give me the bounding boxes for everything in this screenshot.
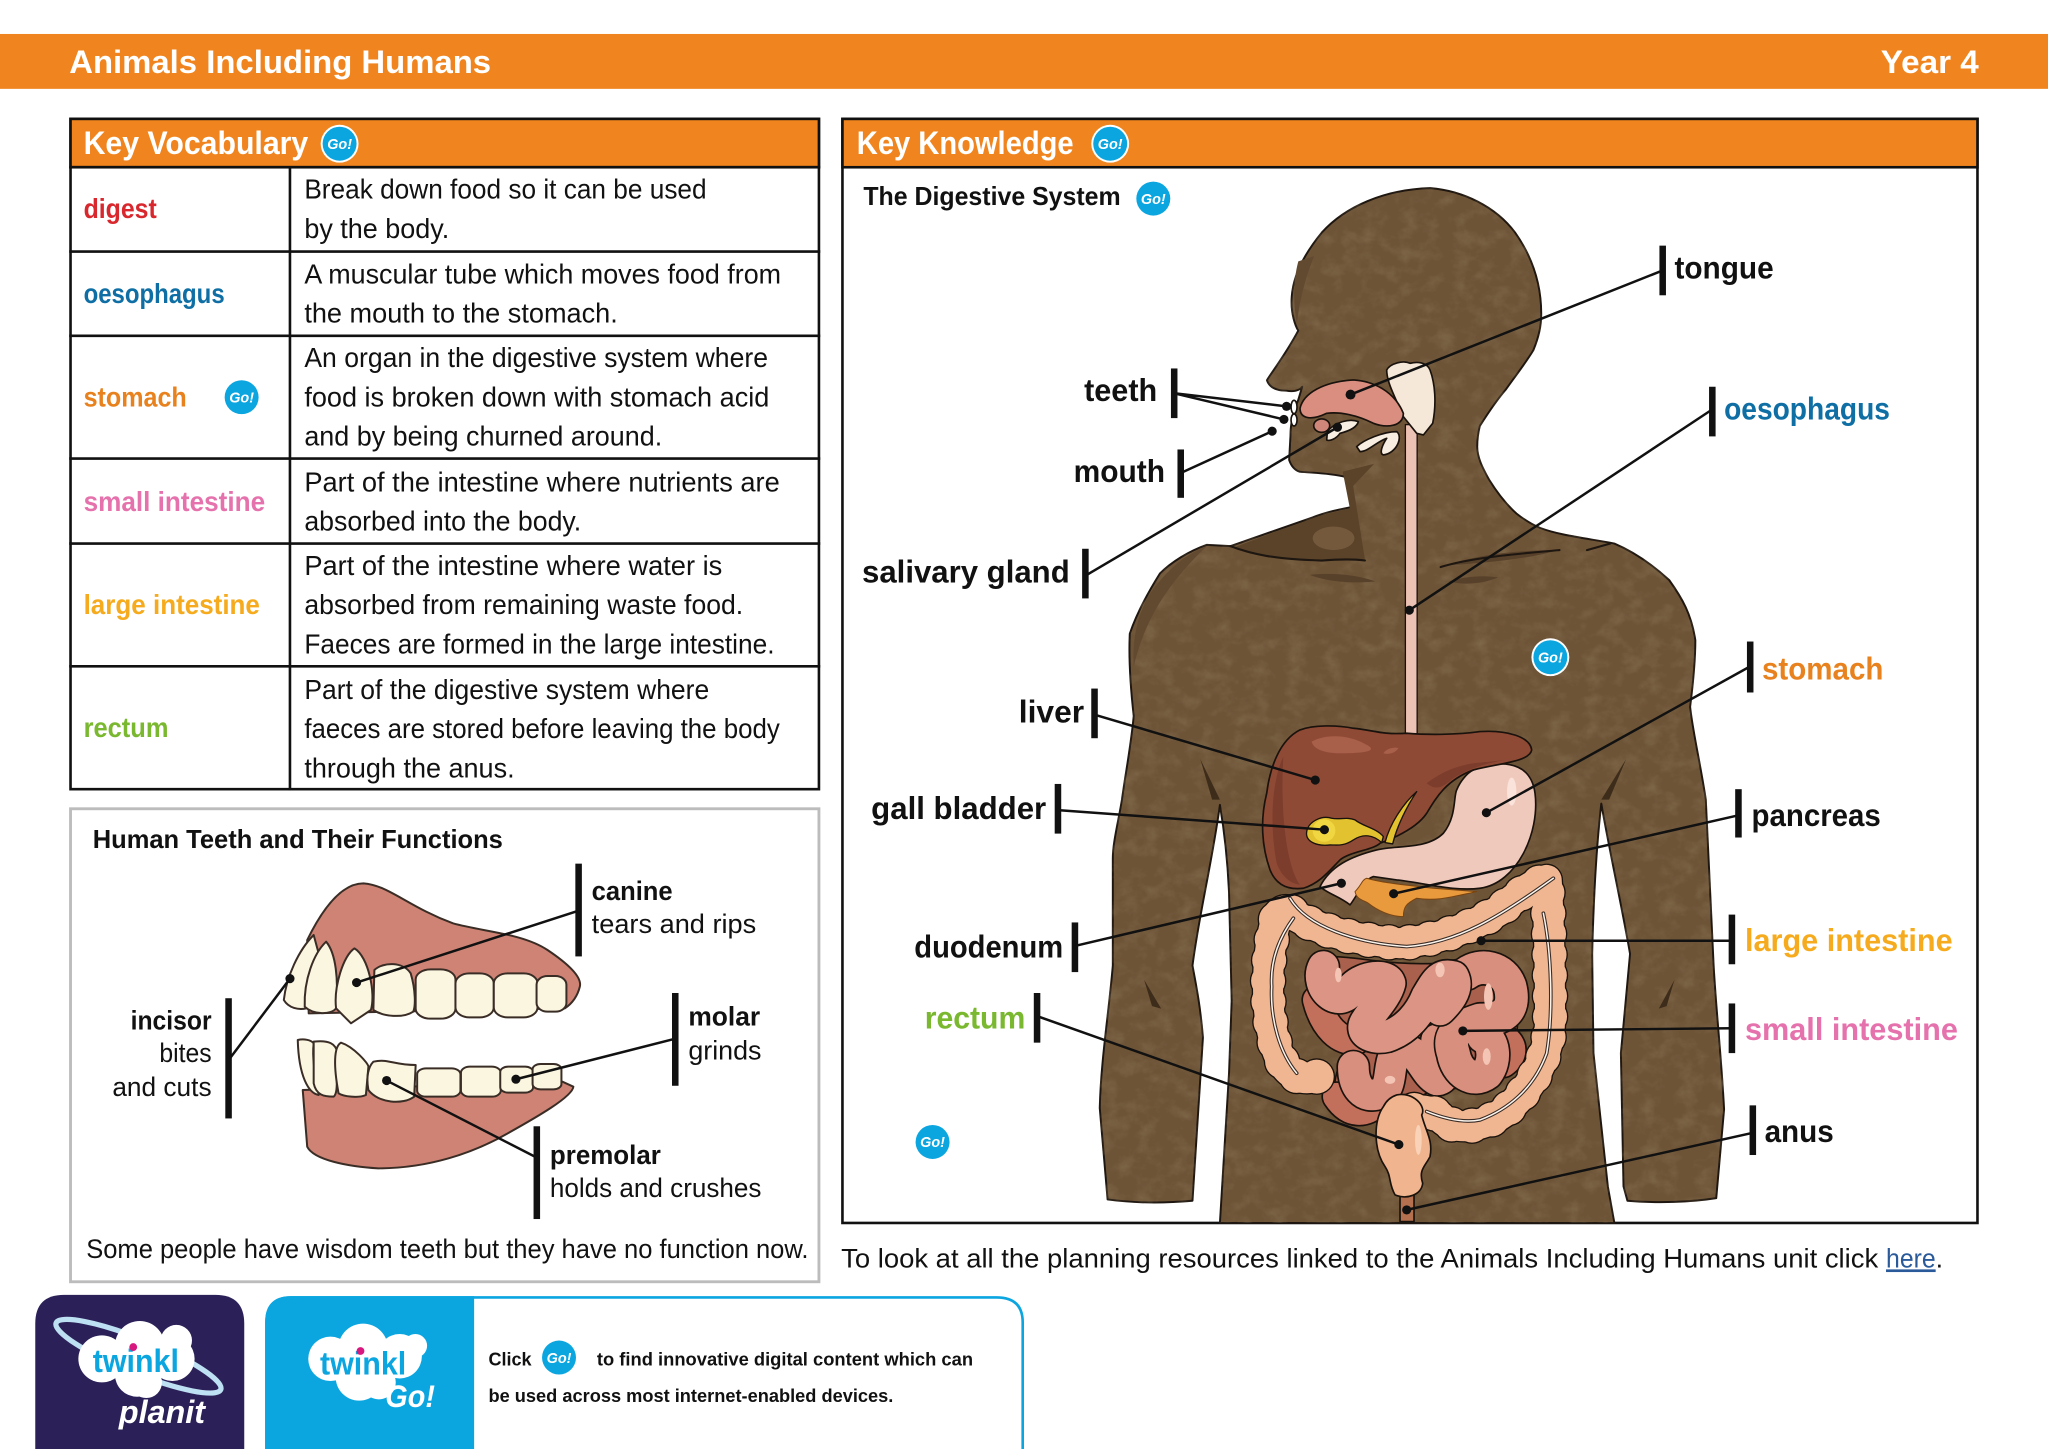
row: rectum: rectum <box>84 712 168 743</box>
logo: twinkl planit: twinkl <box>93 1342 179 1379</box>
row: small intestine: absorbed into the body. <box>304 505 581 536</box>
go instructions text: be used across most internet-enabled devices. <box>488 1385 893 1406</box>
label: anus: anus <box>1765 1114 1834 1149</box>
label: mouth: mouth <box>1074 454 1165 489</box>
oesophagus tube <box>1405 425 1417 738</box>
row: stomach: stomach <box>84 381 187 412</box>
row: large intestine: Faeces are formed in the large intestine. <box>304 628 775 659</box>
row: large intestine: Part of the intestine where water is <box>304 550 722 581</box>
label: rectum <box>925 993 1403 1149</box>
row: large intestine: absorbed from remaining waste food. <box>304 589 743 620</box>
label: oesophagus <box>1405 387 1890 615</box>
row: rectum: faeces are stored before leaving the body <box>304 713 780 744</box>
label: pancreas <box>1389 789 1881 898</box>
abdominal organs <box>1263 726 1553 1222</box>
panel header: key knowledge <box>842 119 1977 167</box>
label: canine: canine <box>592 876 673 906</box>
label: anus <box>1402 1105 1834 1214</box>
go instructions text: Click <box>488 1348 532 1369</box>
label: canine <box>352 864 756 987</box>
subheading: the digestive system: The Digestive System <box>863 181 1121 211</box>
label: premolar: holds and crushes <box>550 1173 761 1203</box>
label: molar <box>511 993 761 1086</box>
row: digest: digest <box>84 193 157 224</box>
row: oesophagus: A muscular tube which moves food from <box>304 259 781 290</box>
row: rectum: through the anus. <box>304 752 515 783</box>
label: teeth <box>1084 368 1291 424</box>
label: canine: tears and rips <box>592 909 756 939</box>
label: incisor: and cuts <box>112 1072 212 1102</box>
row: digest: by the body. <box>304 213 449 244</box>
label: duodenum: duodenum <box>914 930 1063 965</box>
label: salivary gland: salivary gland <box>862 555 1070 590</box>
label: tongue <box>1346 246 1774 400</box>
logo: twinkl go cloud <box>308 1324 435 1414</box>
header bar <box>0 34 2048 89</box>
label: stomach <box>1482 642 1883 817</box>
row: oesophagus <box>84 259 781 329</box>
row: small intestine: small intestine <box>84 486 265 517</box>
row: stomach: An organ in the digestive system where <box>304 342 768 373</box>
label: incisor: incisor <box>131 1006 212 1036</box>
stomach <box>1320 764 1536 905</box>
pancreas <box>1355 878 1477 917</box>
panel: human teeth <box>71 809 819 1282</box>
icon: go badge lower left <box>914 1123 952 1161</box>
row: rectum: Part of the digestive system where <box>304 674 709 705</box>
illustration: human body with digestive system <box>1100 188 1724 1223</box>
row: stomach <box>84 342 769 452</box>
note: wisdom teeth: Some people have wisdom teeth but they have no function now. <box>86 1234 808 1264</box>
heading: key vocabulary: Key Vocabulary <box>84 124 308 161</box>
row: oesophagus: the mouth to the stomach. <box>304 298 618 329</box>
rectum and anus <box>1376 1094 1431 1222</box>
label: teeth: teeth <box>1084 373 1157 408</box>
row: digest: Break down food so it can be used <box>304 174 707 205</box>
icon: go badge <box>1091 125 1129 163</box>
large intestine <box>1268 878 1553 1126</box>
panel: key vocabulary <box>69 119 820 790</box>
body shading <box>1133 256 1674 1009</box>
panel: twinkl go <box>265 1296 1023 1449</box>
label: gall bladder: gall bladder <box>871 791 1046 826</box>
planning resources link text: . <box>1936 1243 1943 1273</box>
label: liver: liver <box>1019 695 1084 730</box>
planning resources link text: To look at all the planning resources linked to the Animals Including Humans unit click <box>841 1243 1879 1273</box>
go instructions text <box>488 1339 973 1406</box>
label: duodenum <box>914 879 1346 972</box>
title: Animals Including Humans <box>69 43 491 80</box>
label: rectum: rectum <box>925 1000 1025 1035</box>
go instructions text: to find innovative digital content which can <box>597 1348 973 1369</box>
label: premolar: premolar <box>550 1140 661 1170</box>
label: incisor: bites <box>159 1038 212 1068</box>
icon: go badge on body <box>1531 638 1569 676</box>
row: rectum <box>84 674 780 783</box>
row: stomach: and by being churned around. <box>304 421 662 452</box>
label: premolar <box>382 1076 761 1219</box>
label: pancreas: pancreas <box>1752 798 1881 833</box>
row: small intestine <box>84 466 780 536</box>
heading: key knowledge: Key Knowledge <box>857 124 1074 161</box>
heading: human teeth: Human Teeth and Their Functions <box>93 824 503 854</box>
row: large intestine: large intestine <box>84 589 260 620</box>
icon: go badge <box>321 125 359 163</box>
row: large intestine <box>84 550 775 659</box>
row: stomach: food is broken down with stomach acid <box>304 381 769 412</box>
label: salivary gland <box>862 423 1342 598</box>
planning resources link text: here <box>1886 1243 1936 1273</box>
label: liver <box>1019 689 1320 785</box>
label: oesophagus: oesophagus <box>1724 391 1890 426</box>
logo: twinkl go cloud: Go! <box>385 1379 435 1414</box>
illustration: teeth and gums <box>284 883 580 1168</box>
label: stomach: stomach <box>1762 651 1883 686</box>
label: tongue: tongue <box>1674 250 1774 285</box>
label: large intestine: large intestine <box>1745 923 1953 958</box>
label: small intestine: small intestine <box>1745 1012 1958 1047</box>
gall bladder <box>1307 792 1417 845</box>
row: oesophagus: oesophagus <box>84 278 225 309</box>
label: mouth <box>1074 427 1277 498</box>
label: incisor <box>112 974 295 1118</box>
logo: twinkl planit <box>35 1295 244 1449</box>
logo: twinkl go cloud: twinkl <box>320 1345 406 1382</box>
liver <box>1263 726 1532 889</box>
label: molar: grinds <box>688 1036 761 1066</box>
logo: twinkl planit: planit <box>118 1393 206 1430</box>
row: digest <box>84 174 707 244</box>
mouth anatomy <box>1291 362 1435 455</box>
label: gall bladder <box>871 784 1329 834</box>
row: small intestine: Part of the intestine where nutrients are <box>304 466 780 497</box>
subheading: the digestive system <box>863 180 1172 218</box>
small intestine <box>1309 957 1518 1118</box>
label: large intestine <box>1477 915 1953 964</box>
panel: key knowledge <box>842 119 1977 1223</box>
label: molar: molar <box>688 1002 761 1032</box>
year label: Year 4 <box>1881 43 1979 80</box>
label: small intestine <box>1458 1003 1958 1053</box>
